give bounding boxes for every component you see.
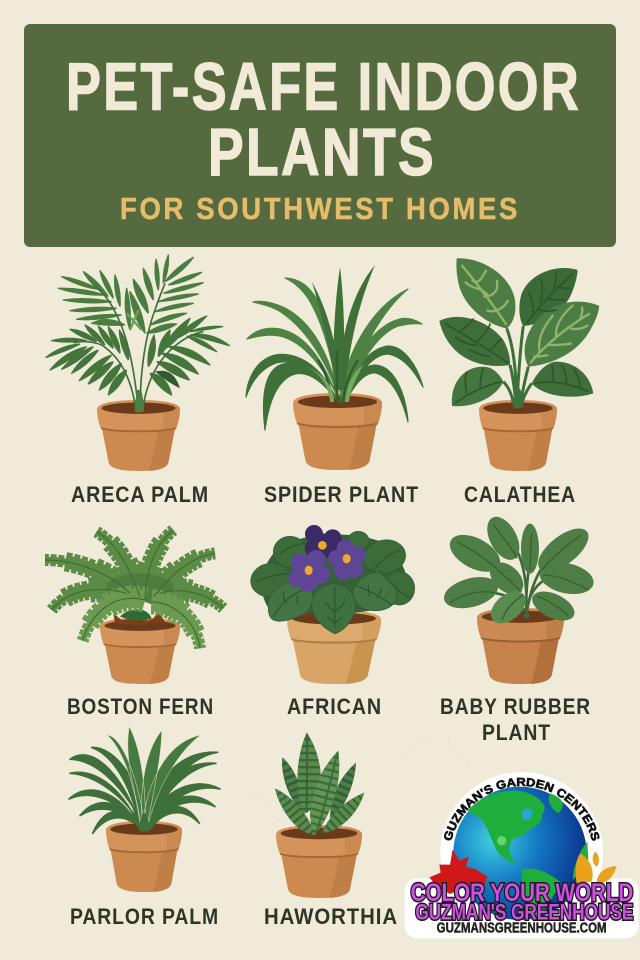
plant: boston fern <box>45 530 223 719</box>
label: PARLOR PALM <box>70 904 219 929</box>
slogan text <box>411 879 633 924</box>
pot <box>97 400 180 471</box>
plant: spider plant <box>246 265 423 507</box>
logo: Guzman's Garden Centers <box>404 772 639 938</box>
pot <box>276 825 362 898</box>
plant: parlor palm <box>69 727 220 929</box>
leaves <box>439 258 599 408</box>
plant: haworthia <box>264 733 398 929</box>
plant: baby rubber plant <box>440 511 596 745</box>
logo white backing <box>405 772 639 938</box>
title: PLANTS <box>208 115 436 190</box>
header banner <box>24 24 616 247</box>
pot <box>100 618 180 684</box>
leaves <box>275 733 364 835</box>
title <box>66 50 581 190</box>
label: BABY RUBBER <box>440 694 591 719</box>
leaves <box>69 727 220 833</box>
label line 2: PLANT <box>482 720 551 745</box>
leaves <box>441 511 596 630</box>
banner panel <box>24 24 616 247</box>
label: HAWORTHIA <box>264 904 398 929</box>
leaves <box>246 265 423 430</box>
red flower <box>429 849 487 894</box>
label: BOSTON FERN <box>67 694 214 719</box>
pot <box>106 821 182 892</box>
plant: areca palm <box>46 255 229 507</box>
fronds <box>46 255 229 412</box>
globe <box>453 787 588 920</box>
label: AFRICAN <box>287 694 382 719</box>
pot <box>477 608 564 684</box>
arc text: GUZMAN'S GARDEN CENTERS <box>444 778 600 841</box>
fronds <box>45 530 223 648</box>
label: SPIDER PLANT <box>264 482 419 507</box>
plant: african violet <box>248 525 415 719</box>
plant: calathea <box>439 258 599 507</box>
pot <box>479 400 557 471</box>
label: ARECA PALM <box>71 482 209 507</box>
subtitle: FOR SOUTHWEST HOMES <box>120 191 520 226</box>
faint speckles <box>252 737 470 830</box>
orange flower <box>576 852 617 883</box>
pot <box>293 393 382 470</box>
leaves and flowers <box>248 525 415 634</box>
pot <box>287 610 381 684</box>
label: CALATHEA <box>464 482 576 507</box>
